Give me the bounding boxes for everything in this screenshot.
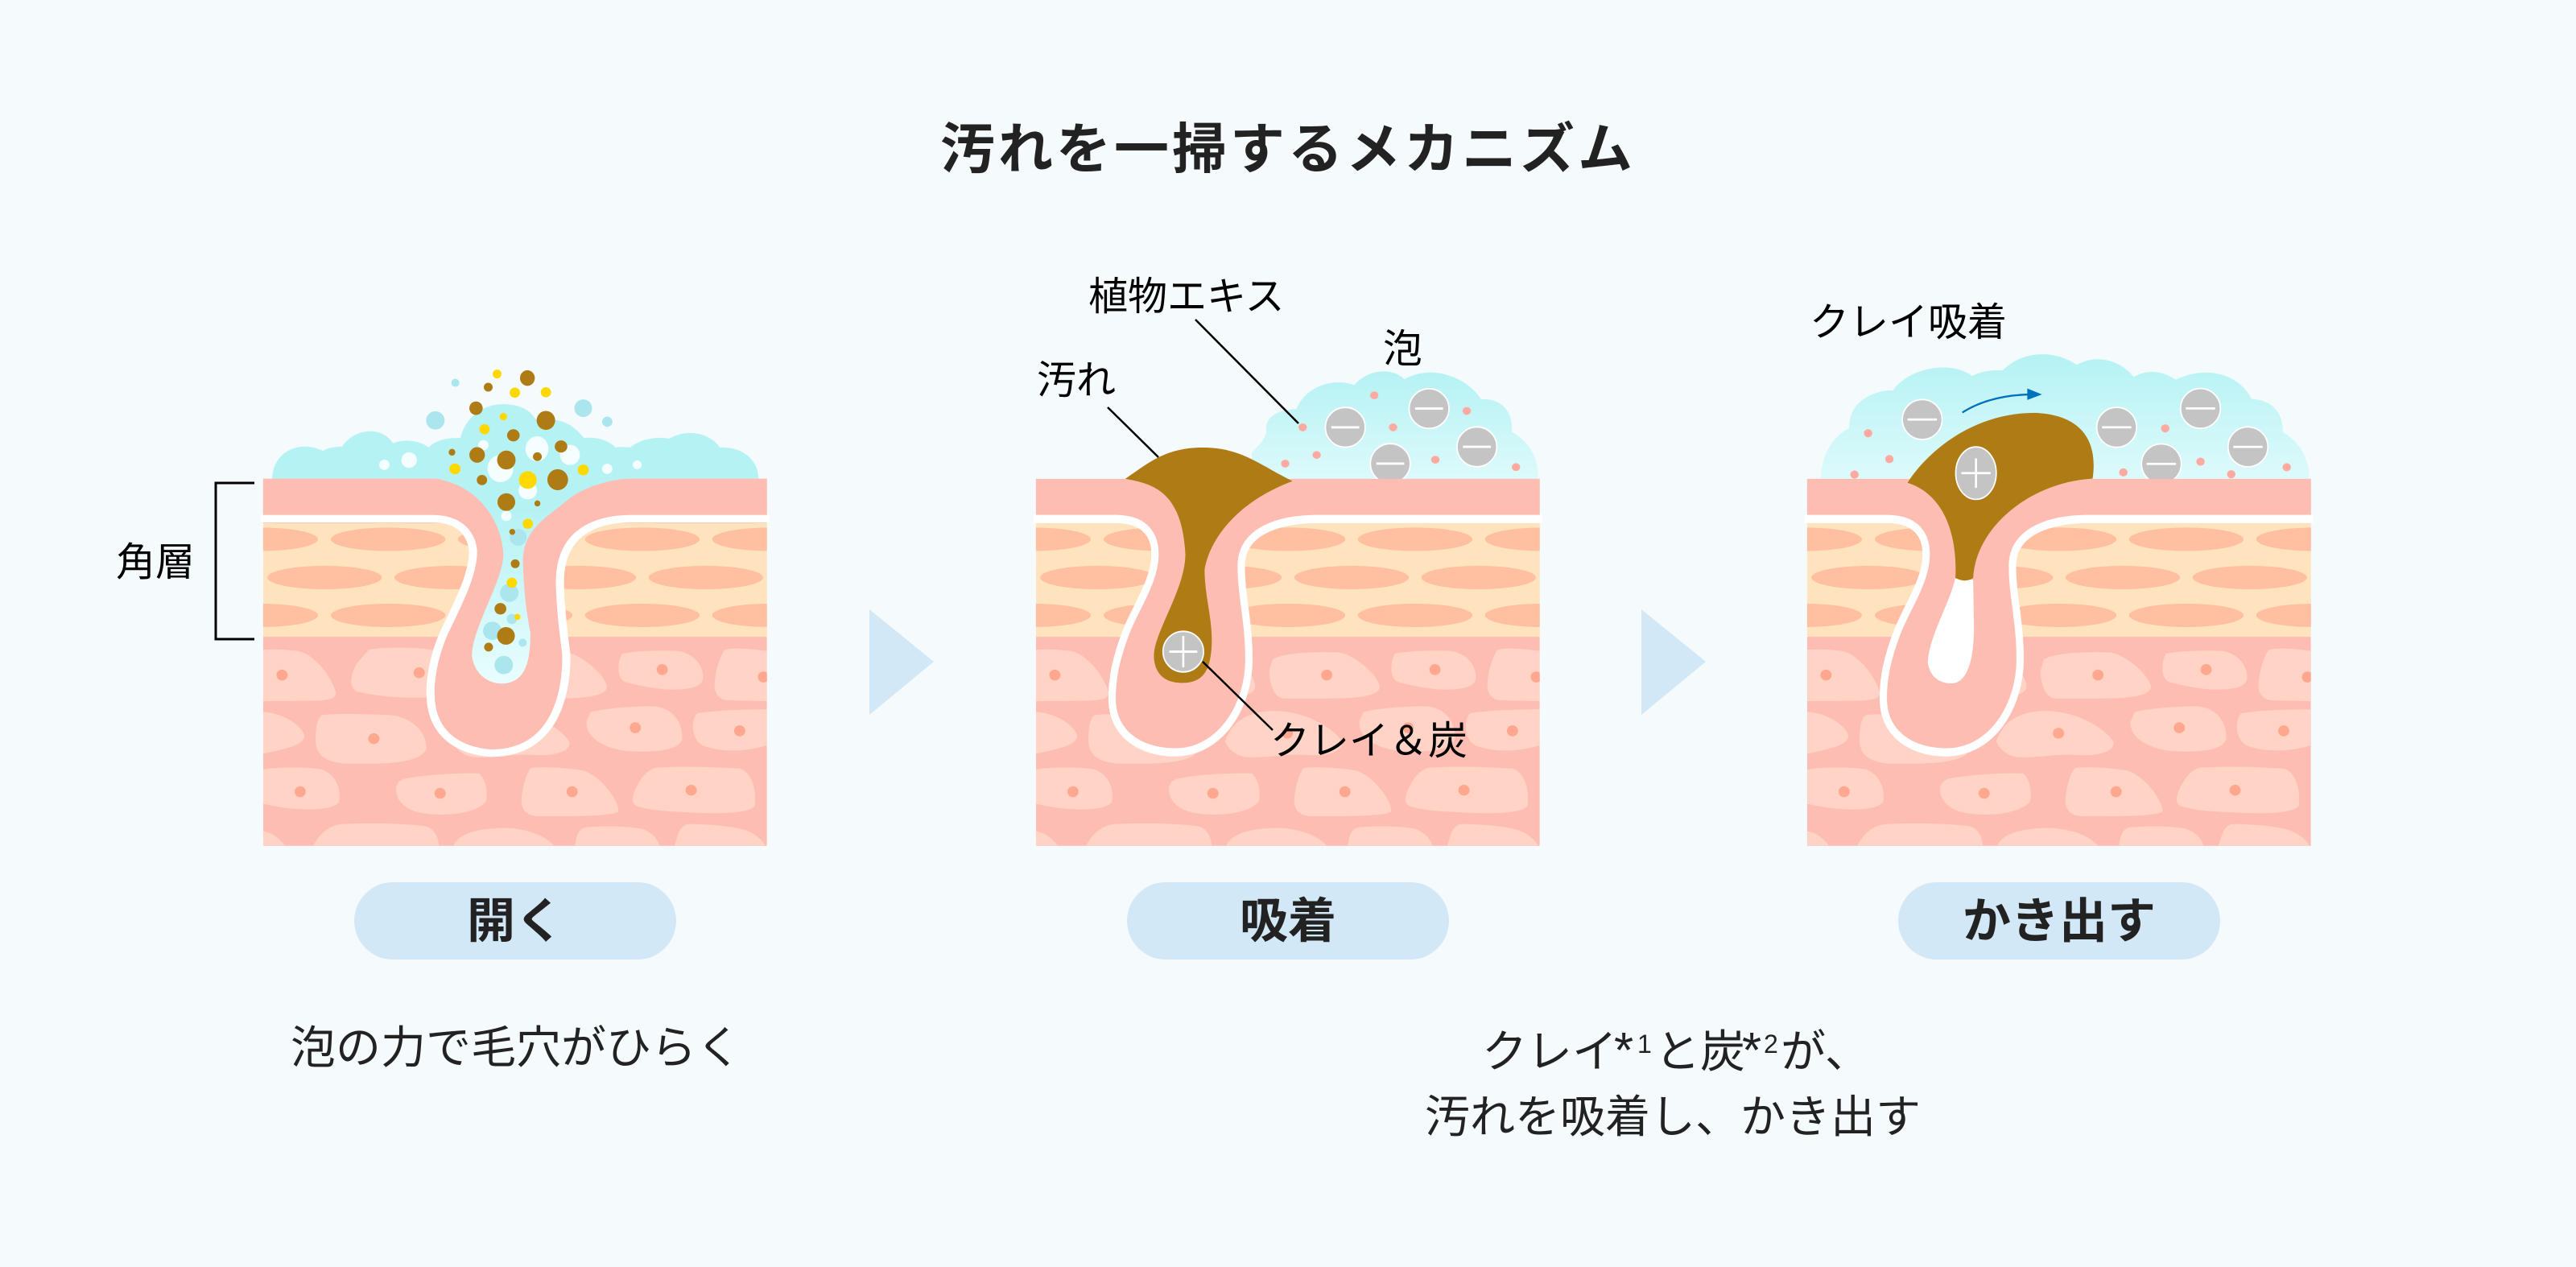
foam bubbles and dirt particles bbox=[379, 369, 642, 675]
description: steps two and three: と炭 bbox=[1655, 1026, 1745, 1077]
title: 汚れを一掃するメカニズム bbox=[940, 119, 1636, 180]
label: clay adsorption: クレイ吸着 bbox=[1810, 301, 2007, 345]
panel: adsorption bbox=[976, 275, 1600, 846]
label: foam: 泡 bbox=[1383, 328, 1422, 371]
skin layers and cells bbox=[1748, 479, 2371, 846]
pill: extract: かき出す bbox=[1963, 894, 2156, 948]
skin layers and cells bbox=[976, 479, 1600, 846]
description: steps two and three: 1 bbox=[1637, 1030, 1652, 1059]
description: steps two and three: クレイ bbox=[1482, 1026, 1617, 1077]
foam with charged particles bbox=[1821, 354, 2309, 484]
foam above skin bbox=[272, 404, 758, 479]
description: steps two and three: * bbox=[1614, 1023, 1633, 1079]
bracket: stratum corneum bbox=[216, 483, 254, 639]
description: steps two and three: が、 bbox=[1781, 1026, 1870, 1077]
dirt in pore with clay particle bbox=[1125, 448, 1293, 683]
pill: open bbox=[354, 882, 676, 960]
foam with charged particles bbox=[1252, 371, 1538, 484]
arrow: step one to two bbox=[869, 609, 934, 715]
arrow: lifting motion bbox=[1963, 389, 2042, 412]
label: dirt: 汚れ bbox=[1037, 359, 1116, 402]
pill: adsorb: 吸着 bbox=[1240, 894, 1336, 948]
description: steps two and three: * bbox=[1742, 1023, 1761, 1079]
description: steps two and three: 2 bbox=[1764, 1030, 1778, 1059]
pore bbox=[1034, 479, 1542, 753]
pill: extract bbox=[1898, 882, 2220, 960]
description: step one: 泡の力で毛穴がひらく bbox=[291, 1022, 741, 1073]
pore outline and foam channel bbox=[261, 479, 770, 753]
pore bbox=[1805, 479, 2314, 753]
dirt lifted from pore with clay particle bbox=[1908, 413, 2094, 683]
pill: adsorb bbox=[1127, 882, 1449, 960]
skin layers and cells bbox=[204, 479, 827, 846]
pill: open: 開く bbox=[467, 894, 564, 948]
leader lines bbox=[1108, 320, 1298, 730]
description: steps two and three: 汚れを吸着し、かき出す bbox=[1425, 1092, 1921, 1142]
panel: extraction bbox=[1748, 301, 2371, 846]
arrow: step two to three bbox=[1641, 609, 1706, 715]
label: clay and charcoal: クレイ＆炭 bbox=[1270, 720, 1468, 763]
label: plant extract: 植物エキス bbox=[1088, 275, 1285, 319]
panel: open pores bbox=[116, 369, 827, 846]
label: stratum corneum: 角層 bbox=[116, 541, 195, 584]
